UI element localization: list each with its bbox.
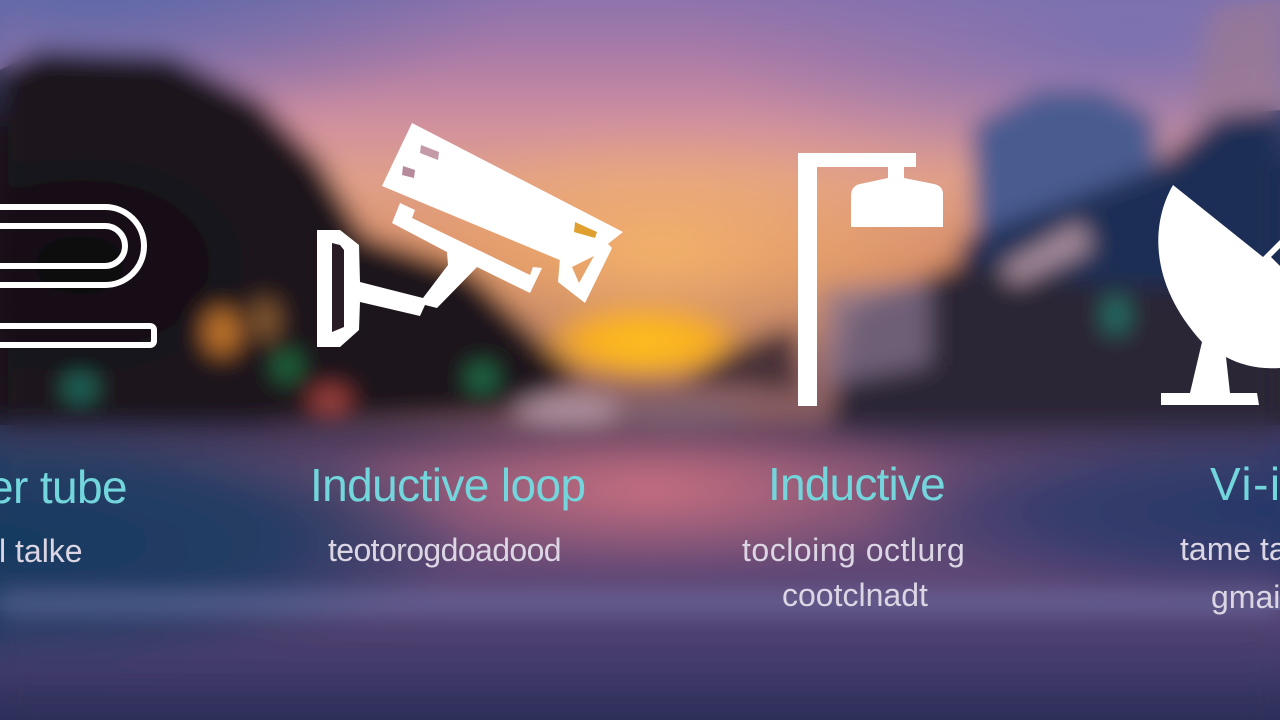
description: teotorogdoadood [328, 532, 561, 568]
column 1: pneumatic tube [0, 204, 157, 569]
column 3: inductive lamp post [742, 153, 965, 613]
description: l talke [0, 533, 83, 569]
icon: satellite dish [1158, 185, 1280, 405]
heading: Inductive [768, 458, 945, 510]
description line 2: cootclnadt [782, 577, 928, 613]
column 2: inductive loop camera [310, 123, 623, 568]
heading: Inductive loop [310, 459, 585, 511]
icon: road tube [0, 204, 157, 348]
description: tocloing octlurg [742, 532, 965, 568]
description line 2: gmai [1211, 579, 1280, 615]
icon: street lamp [798, 153, 943, 406]
column 4: vehicle radar dish [1158, 185, 1280, 615]
heading: Vi-i [1210, 458, 1280, 510]
icon: security camera [317, 123, 623, 347]
